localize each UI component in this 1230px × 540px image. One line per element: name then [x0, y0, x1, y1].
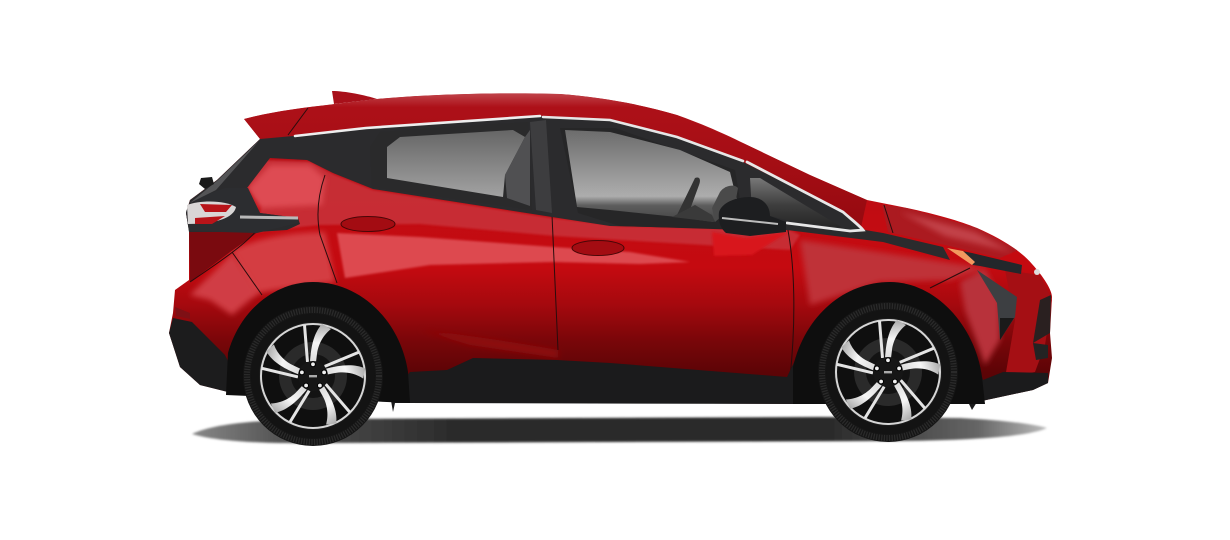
front quarter glass — [750, 178, 843, 228]
rear wheel — [243, 306, 383, 446]
rear reflector — [175, 307, 190, 319]
rear bumper — [169, 318, 245, 395]
dark greenhouse band — [186, 116, 950, 260]
ground shadow — [192, 417, 1047, 443]
chrome window trim — [295, 116, 863, 231]
rear hatch glass — [190, 141, 259, 203]
car body — [169, 93, 1052, 404]
headlight and front fascia — [947, 248, 1051, 360]
side pillar sheen — [530, 120, 552, 213]
lower black cladding — [390, 350, 1048, 412]
wheel arches — [226, 282, 985, 404]
front wheel — [818, 302, 958, 442]
rear window — [370, 122, 532, 210]
side mirror — [719, 197, 786, 236]
tail light — [186, 177, 298, 233]
illustration: red hatchback side view — [169, 91, 1052, 446]
door handles — [341, 216, 624, 256]
paint reflections — [189, 93, 1052, 378]
roof fin — [332, 91, 377, 104]
door shut lines — [190, 108, 970, 378]
front window — [560, 128, 745, 230]
